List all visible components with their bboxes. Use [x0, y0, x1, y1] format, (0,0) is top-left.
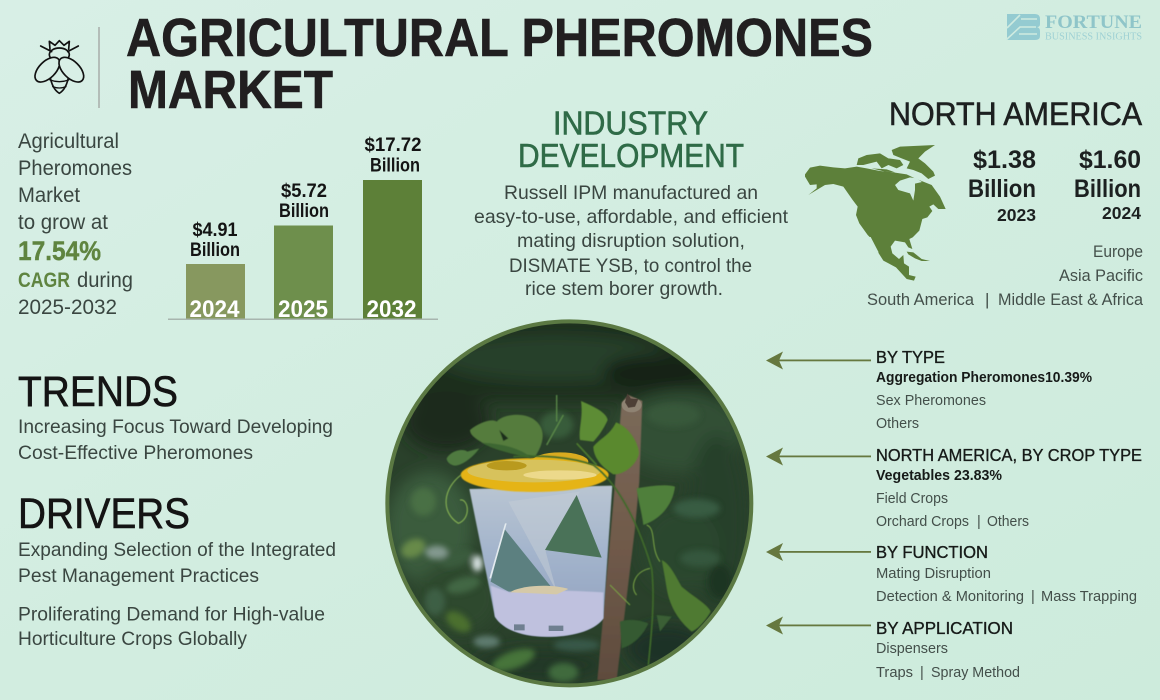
text block: trends — [18, 368, 333, 464]
trap body — [469, 486, 612, 637]
stats: North America 2024: $1.60 — [1079, 146, 1141, 174]
list: other regions: South America — [867, 290, 975, 309]
list: other regions: Asia Pacific — [1059, 266, 1143, 285]
bar: 2032: Billion — [370, 156, 420, 176]
segment: North America by crop type: NORTH AMERICA, BY CROP TYPE — [876, 445, 1142, 465]
text block: drivers: Pest Management Practices — [18, 565, 259, 587]
segment: by type: BY TYPE — [876, 347, 945, 367]
text block: CAGR growth: Pheromones — [18, 157, 132, 180]
text block: drivers: Proliferating Demand for High-value — [18, 604, 325, 626]
segment: North America by crop type: Others — [987, 514, 1029, 530]
text block: industry development: easy-to-use, affordable, and efficient — [474, 206, 789, 228]
text block: drivers: Expanding Selection of the Integrated — [18, 539, 336, 561]
segment: by function: Detection & Monitoring — [876, 589, 1024, 605]
bar: 2024: 2024 — [190, 296, 240, 323]
trap lid — [533, 452, 588, 464]
segment: by type: Others — [876, 416, 919, 432]
text block: industry development: DISMATE YSB, to control the — [509, 255, 752, 277]
arrow: by type — [766, 352, 871, 370]
segment: by function: Mass Trapping — [1041, 589, 1137, 605]
segment: by application: Traps — [876, 665, 913, 681]
stake — [597, 395, 642, 680]
bar: 2032: 2032 — [366, 296, 416, 323]
bar: 2024 — [186, 220, 245, 323]
text block: CAGR growth: to grow at — [18, 211, 108, 234]
segment: North America by crop type: Orchard Crops — [876, 514, 969, 530]
map: North America — [805, 145, 946, 281]
segment: by function: | — [1031, 589, 1035, 605]
segment: North America by crop type: Vegetables 23.83% — [876, 468, 1002, 484]
segment: North America by crop type: Field Crops — [876, 491, 948, 507]
stats: North America 2023 — [968, 146, 1036, 225]
segment: by type: Sex Pheromones — [876, 393, 986, 409]
text block: drivers: Horticulture Crops Globally — [18, 628, 247, 650]
bar: 2025 — [274, 181, 333, 323]
bar: 2025: Billion — [279, 201, 329, 222]
segment: by function: BY FUNCTION — [876, 542, 988, 562]
text block: drivers — [18, 490, 336, 650]
stats: North America 2023: 2023 — [997, 205, 1036, 225]
text block: CAGR growth: during — [77, 269, 133, 292]
stats: North America 2024: 2024 — [1102, 203, 1141, 223]
text block: trends: TRENDS — [18, 368, 178, 416]
stats: North America 2024 — [1074, 146, 1141, 223]
bar chart: market size — [168, 135, 438, 323]
text block: CAGR growth: Agricultural — [18, 130, 119, 153]
leaves — [447, 401, 711, 648]
bar: 2025: 2025 — [278, 296, 328, 323]
divider: header — [98, 27, 100, 108]
segment: by application: Dispensers — [876, 641, 948, 657]
arrow: by function — [766, 543, 871, 561]
list: other regions: | — [985, 290, 989, 309]
bar: 2032: $17.72 — [364, 135, 422, 156]
title: MARKET — [128, 60, 333, 120]
arrow: by application — [766, 616, 871, 634]
text block: trends: Increasing Focus Toward Developing — [18, 416, 333, 438]
text block: CAGR growth: 2025-2032 — [18, 296, 117, 319]
heading: industry development — [518, 104, 744, 174]
bar: 2025: $5.72 — [281, 181, 327, 202]
segment: by function: Mating Disruption — [876, 566, 991, 582]
logo: Fortune Business Insights: FORTUNE — [1045, 12, 1142, 33]
title — [126, 8, 873, 120]
title: AGRICULTURAL PHEROMONES — [126, 8, 873, 68]
segment: by type: Aggregation Pheromones10.39% — [876, 370, 1092, 386]
arrow: by crop type — [766, 448, 871, 466]
list: other regions — [867, 242, 1144, 309]
list: other regions: Middle East & Africa — [998, 290, 1144, 309]
icon: bee — [31, 41, 88, 93]
heading: North America: NORTH AMERICA — [889, 96, 1143, 132]
bar: 2024: Billion — [190, 240, 240, 261]
text block: CAGR growth: CAGR — [18, 269, 70, 292]
segment: by application — [876, 618, 1020, 681]
heading: industry development: DEVELOPMENT — [518, 137, 744, 174]
segment: by function — [876, 542, 1137, 605]
logo: Fortune Business Insights — [1006, 12, 1142, 42]
text block: trends: Cost-Effective Pheromones — [18, 442, 253, 464]
segment: North America by crop type: | — [977, 514, 981, 530]
text block: drivers: DRIVERS — [18, 490, 190, 538]
text block: CAGR growth — [18, 130, 133, 319]
segment: by application: Spray Method — [931, 665, 1020, 681]
bar: 2032 — [363, 135, 422, 323]
stats: North America 2023: Billion — [968, 175, 1036, 203]
segment: by application: | — [920, 665, 924, 681]
text block: industry development: Russell IPM manufactured an — [504, 182, 758, 204]
vine — [446, 395, 660, 665]
segment: by type — [876, 347, 1092, 432]
bar: 2024: $4.91 — [192, 220, 238, 241]
photo: pheromone trap on a stake — [380, 315, 760, 695]
stats: North America 2024: Billion — [1074, 175, 1141, 203]
logo: Fortune Business Insights: BUSINESS INSIGHTS — [1045, 32, 1142, 42]
text block: industry development: mating disruption solution, — [517, 230, 745, 252]
text block: industry development: rice stem borer growth. — [525, 278, 723, 300]
text block: CAGR growth: Market — [18, 184, 80, 207]
segment: by application: BY APPLICATION — [876, 618, 1013, 638]
text block: industry development — [474, 182, 789, 300]
stats: North America 2023: $1.38 — [973, 146, 1036, 174]
segment: North America by crop type — [876, 445, 1142, 530]
heading: industry development: INDUSTRY — [553, 104, 708, 142]
list: other regions: Europe — [1093, 242, 1143, 261]
text block: CAGR growth: 17.54% — [18, 236, 101, 266]
